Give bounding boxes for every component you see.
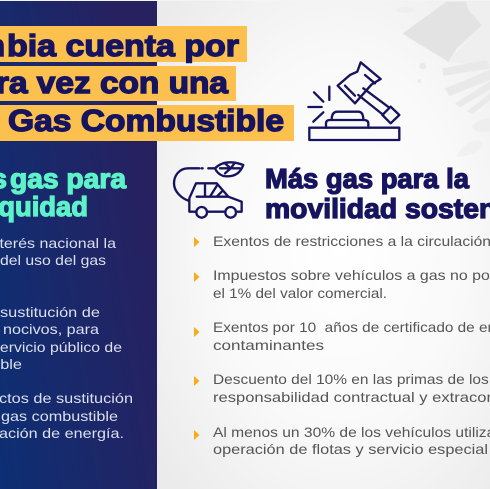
panel: light background bbox=[157, 1, 490, 489]
bullet: certificate bbox=[194, 319, 490, 353]
bullet: fleets: operación de flotas y servicio especial bbox=[213, 441, 488, 457]
text block: projects bbox=[0, 390, 133, 441]
bullet: restrictions: Exentos de restricciones a la circulación bbox=[213, 233, 490, 249]
title highlight bands bbox=[0, 26, 294, 141]
heading: left column: gas para bbox=[10, 163, 126, 194]
bullet: insurance bbox=[194, 371, 490, 405]
text block: interest: del uso del gas bbox=[0, 252, 106, 268]
bullet: insurance: responsabilidad contractual y extracontractual bbox=[213, 389, 490, 405]
heading: left column bbox=[0, 163, 126, 222]
text block: substitution bbox=[0, 304, 122, 372]
bullet: certificate: contaminantes bbox=[213, 337, 324, 353]
text block: substitution: sustitución de bbox=[0, 304, 100, 320]
bullet: taxes: el 1% del valor comercial. bbox=[213, 285, 387, 301]
text block: substitution: nocivos, para bbox=[3, 321, 99, 337]
decorative gray leaves bbox=[395, 2, 490, 157]
title banner bbox=[0, 26, 294, 141]
bullet: fleets bbox=[194, 424, 490, 457]
title text bbox=[0, 28, 284, 138]
title text: Gas Combustible bbox=[8, 103, 284, 138]
left column text bbox=[0, 235, 133, 441]
text block: projects: gas combustible bbox=[1, 408, 118, 424]
panel: navy left column bbox=[0, 1, 157, 489]
text block: projects: ación de energía. bbox=[0, 425, 124, 441]
heading: right column bbox=[265, 163, 490, 224]
text block: interest bbox=[0, 235, 116, 268]
text block: projects: ctos de sustitución bbox=[0, 390, 133, 406]
heading: right column: Más gas para la bbox=[265, 163, 469, 194]
bullet list bbox=[194, 233, 490, 457]
bullet: taxes bbox=[194, 267, 490, 301]
title text: bia cuenta por bbox=[7, 28, 239, 63]
icon: car with leaf bbox=[174, 162, 243, 218]
icon: gavel bbox=[308, 62, 399, 140]
